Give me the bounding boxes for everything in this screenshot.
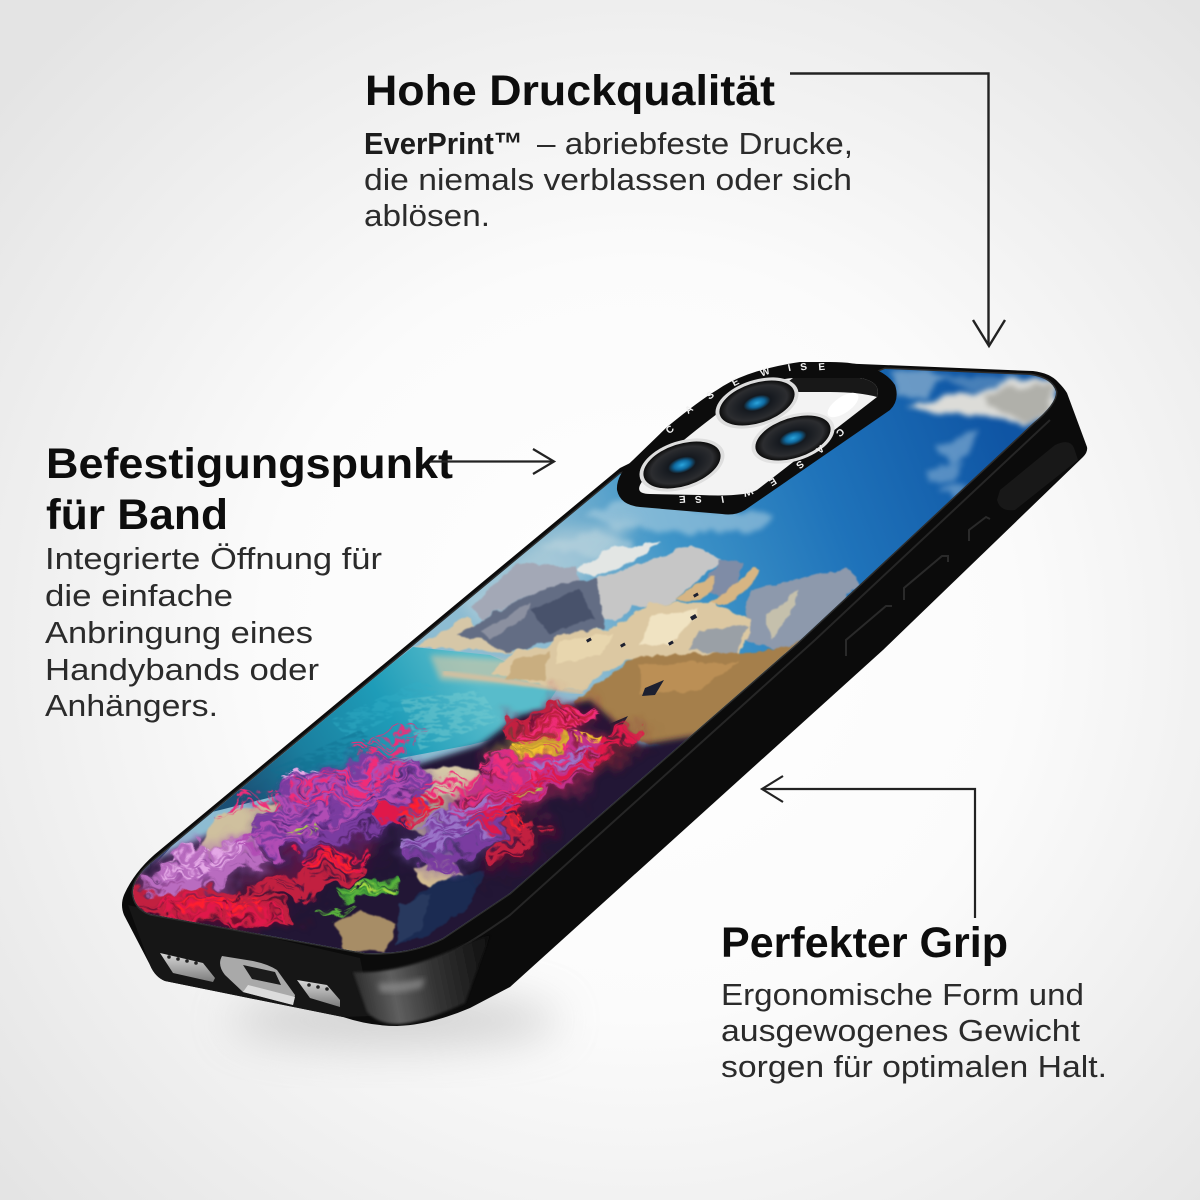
drop shadow under phone <box>230 994 560 1046</box>
heading: Perfekter Grip: Perfekter Grip <box>721 919 1008 967</box>
brand ring text: S <box>705 389 717 402</box>
flash <box>824 388 862 422</box>
brand ring text: W <box>741 485 754 498</box>
volume button upper <box>904 556 948 600</box>
mountains <box>413 542 860 655</box>
bright accents layer <box>148 697 606 915</box>
brand ring text: C <box>664 424 677 437</box>
right speaker <box>297 980 340 1007</box>
charging port <box>220 956 295 1005</box>
arrow: strap attachment point <box>430 449 554 474</box>
sea <box>150 647 560 870</box>
window shadow <box>775 378 878 397</box>
flower colour undertones <box>125 697 645 931</box>
phone case <box>100 350 1087 1026</box>
side strap mount <box>997 442 1078 510</box>
description: EverPrint <box>364 126 853 233</box>
brand ring text: I <box>720 493 725 504</box>
gloss highlight <box>378 978 425 992</box>
sea brushwork <box>312 691 494 768</box>
description: Befestigungspunkt: Anhängers. <box>45 688 218 723</box>
brand ring text: S <box>800 362 808 373</box>
description: EverPrint: die niemals verblassen oder sich <box>364 162 852 197</box>
sand rocks <box>198 767 490 953</box>
shore reflection <box>430 655 530 685</box>
brand ring text: E <box>730 376 742 389</box>
sky haze <box>460 520 640 625</box>
lens left <box>633 429 731 501</box>
brand ring text: E <box>818 362 826 373</box>
left speaker <box>160 953 215 982</box>
brand ring text: S <box>793 458 806 471</box>
deep purple layer <box>119 694 615 932</box>
bottom face <box>128 905 372 1017</box>
printed artwork <box>133 362 1056 954</box>
dark foliage base <box>134 696 696 954</box>
description: EverPrint: EverPrint™ <box>364 126 523 161</box>
brand ring text <box>664 362 846 504</box>
description: Perfekter Grip: ausgewogenes Gewicht <box>721 1013 1080 1048</box>
brand ring text: I <box>787 363 792 374</box>
brand ring text: E <box>678 493 686 504</box>
brand ring text: C <box>833 425 846 438</box>
text block: Hohe Druckqualität <box>364 67 853 233</box>
case body <box>122 363 1087 1026</box>
heading: Befestigungspunkt für Band: für Band <box>46 491 228 539</box>
bump frame <box>617 362 897 514</box>
brand ring text: W <box>759 366 772 379</box>
lens right <box>745 403 841 473</box>
description: Befestigungspunkt: Integrierte Öffnung für <box>45 541 382 576</box>
description: Perfekter Grip: Ergonomische Form und <box>721 977 1084 1012</box>
heading: Befestigungspunkt für Band: Befestigungspunkt <box>46 440 453 488</box>
lens top <box>709 368 805 438</box>
jetty <box>443 673 583 692</box>
arrow: print quality to case top <box>790 74 1005 346</box>
sky clouds <box>540 372 1058 560</box>
description: Befestigungspunkt: Handybands oder <box>45 652 319 687</box>
description: Befestigungspunkt <box>45 541 382 723</box>
gloss corner <box>353 935 490 1024</box>
brand ring text: A <box>683 403 696 417</box>
screen rim <box>133 369 1056 953</box>
volume button lower <box>846 606 892 656</box>
brand ring text: A <box>813 442 826 455</box>
brand ring text: S <box>694 493 702 504</box>
description: EverPrint: – abriebfeste Drucke, <box>537 126 853 161</box>
side switch <box>969 517 990 541</box>
camera bump <box>617 362 897 514</box>
town windows <box>586 592 699 732</box>
text block: Befestigungspunkt <box>45 440 453 723</box>
description: Perfekter Grip <box>721 977 1107 1084</box>
glass window <box>639 378 878 495</box>
description: EverPrint: ablösen. <box>364 198 490 233</box>
side wall highlight <box>400 420 1050 974</box>
arrow: grip to case side <box>762 776 975 918</box>
description: Perfekter Grip: sorgen für optimalen Halt. <box>721 1049 1107 1084</box>
text block: Perfekter Grip <box>721 919 1107 1084</box>
description: Befestigungspunkt: Anbringung eines <box>45 615 313 650</box>
heading: Befestigungspunkt für Band <box>46 440 453 539</box>
brand ring text: E <box>766 475 778 488</box>
heading: Hohe Druckqualität: Hohe Druckqualität <box>365 67 775 115</box>
magenta and lavender layer <box>144 722 644 933</box>
sky <box>133 369 1056 954</box>
town <box>490 567 805 750</box>
description: Befestigungspunkt: die einfache <box>45 578 233 613</box>
flowers and rocks <box>133 679 696 954</box>
